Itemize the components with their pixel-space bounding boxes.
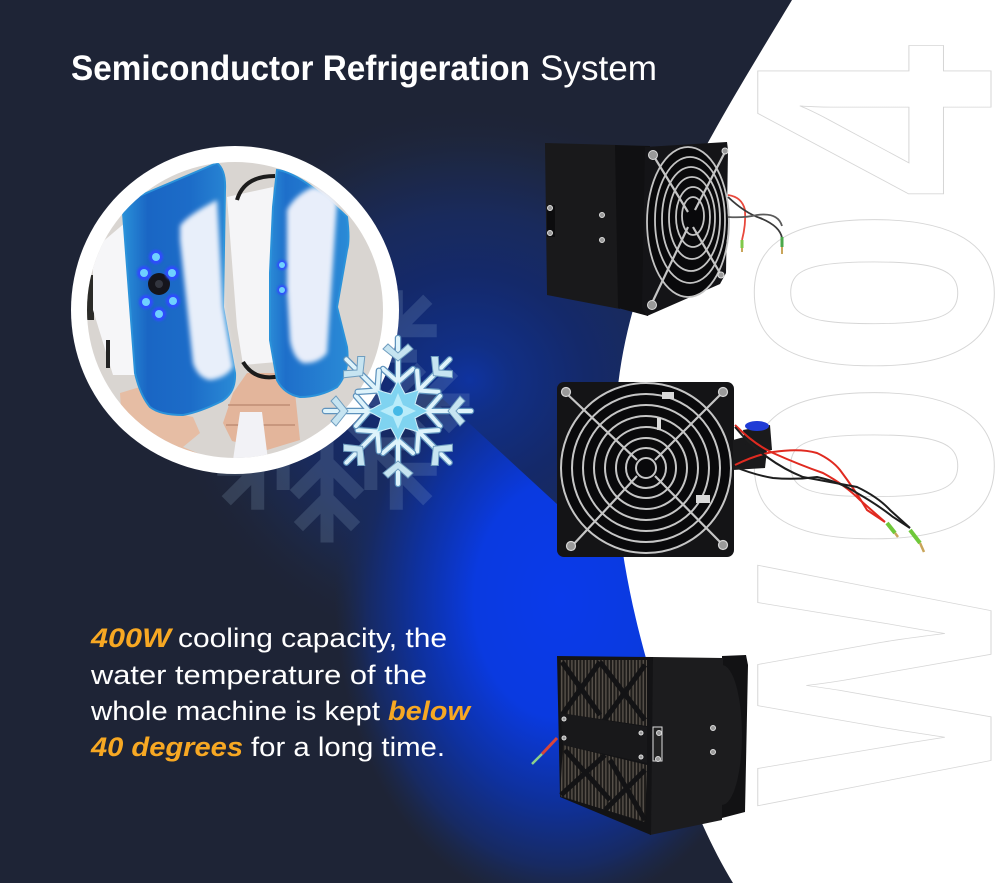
- product: fan unit middle: [557, 382, 924, 557]
- fan grill: [561, 383, 731, 553]
- line 3: [90, 696, 472, 726]
- line 4: [90, 732, 445, 762]
- left blue pad: [123, 163, 235, 415]
- center white body: [227, 187, 277, 365]
- product: fan unit bottom: [532, 655, 748, 835]
- wires: [735, 425, 924, 552]
- line 2: water temperature of the: [90, 660, 427, 690]
- left frost foam: [180, 200, 233, 380]
- camera lens: [148, 273, 170, 295]
- side bracket: [547, 205, 555, 237]
- water connector: [733, 436, 767, 470]
- cross lattice: [561, 662, 645, 820]
- snowflake icon: [325, 338, 471, 484]
- large outlined 400W watermark: [684, 42, 1000, 806]
- left white device body: [93, 224, 134, 375]
- unit body side: [545, 143, 620, 309]
- screws: [562, 388, 728, 550]
- title: System: [540, 49, 657, 88]
- heat-sink face: [557, 656, 653, 835]
- fan grill: [647, 147, 729, 303]
- title: Semiconductor Refrigeration: [71, 49, 530, 88]
- heat-sink fins: [560, 660, 650, 730]
- circular photo: window cleaning device with ice pads: [71, 146, 399, 474]
- line 3: whole machine is kept: [90, 696, 381, 726]
- photo content: [80, 155, 390, 465]
- fan frame: [557, 382, 734, 557]
- fan front face: [642, 142, 728, 316]
- line 4: for a long time.: [251, 732, 445, 762]
- rear fan: [722, 655, 748, 818]
- photo white ring: [71, 146, 399, 474]
- right frost foam: [287, 187, 337, 363]
- right hand: [223, 373, 300, 450]
- wires: [728, 195, 782, 254]
- screws: [548, 148, 728, 310]
- side bracket and screws: [562, 717, 716, 762]
- line 4: 40 degrees: [90, 732, 243, 762]
- right blue pad: [270, 170, 348, 397]
- white curved panel: [614, 0, 1000, 883]
- unit side: [650, 657, 723, 835]
- reflections on fan blades: [657, 392, 710, 503]
- wires: [542, 738, 557, 754]
- blue glow beam: [236, 145, 702, 883]
- mounting plate: [560, 713, 647, 763]
- ghost snowflake: [211, 284, 463, 536]
- product: fan unit top: [545, 142, 782, 316]
- left hand: [120, 388, 200, 454]
- white handle: [233, 412, 268, 460]
- line 1: cooling capacity, the: [178, 623, 447, 653]
- blue LED ring: [137, 250, 287, 321]
- line 1: [90, 623, 447, 653]
- line 1: 400W: [90, 623, 174, 653]
- line 3: below: [388, 696, 472, 726]
- body text block: [90, 623, 472, 762]
